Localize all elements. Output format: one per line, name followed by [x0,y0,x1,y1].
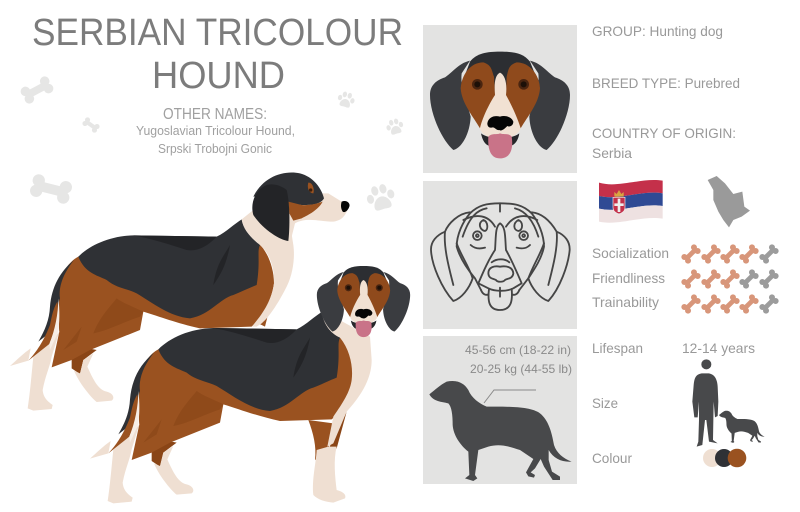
background decoration: bones and paws [19,75,405,213]
panel: size silhouette [423,336,577,484]
rating: trainability: Trainability [592,294,659,310]
fact: breed type: BREED TYPE: Purebred [592,75,740,91]
fact: country of origin: Serbia [592,145,632,161]
pointer line [484,390,536,403]
title: SERBIAN TRICOLOUR [32,12,403,54]
rating: friendliness [592,268,780,290]
height and weight: 45-56 cm (18-22 in) [465,343,571,357]
dog: side profile, back [10,173,350,411]
title [32,12,403,97]
height and weight [465,343,572,376]
fact: size label: Size [592,395,618,411]
other names [136,106,295,156]
panel: colour face [423,25,577,173]
dog: front-facing, front [90,312,372,503]
dog silhouette [429,381,572,481]
panel: line art face [423,181,577,329]
height and weight: 20-25 kg (44-55 lb) [470,362,572,376]
other names: OTHER NAMES: [163,106,267,123]
fact: group: GROUP: Hunting dog [592,23,723,39]
other names: Srpski Trobojni Gonic [158,142,272,156]
fact: colour label: Colour [592,450,632,466]
title: HOUND [152,55,285,97]
fact: country of origin [592,125,736,161]
icon: map of Serbia [708,176,750,227]
fact: lifespan [592,340,755,356]
other names: Yugoslavian Tricolour Hound, [136,124,295,138]
rating: socialization [592,243,780,265]
fact: lifespan: 12-14 years [682,340,755,356]
rating: trainability [592,293,780,315]
colour swatches [703,449,746,467]
rating: socialization: Socialization [592,245,669,261]
rating: friendliness: Friendliness [592,270,665,286]
icon: human and dog size comparison [692,359,765,447]
dog face on front dog [317,266,410,337]
icon: Serbian flag [599,180,663,223]
fact: lifespan: Lifespan [592,340,643,356]
fact: country of origin: COUNTRY OF ORIGIN: [592,125,736,141]
